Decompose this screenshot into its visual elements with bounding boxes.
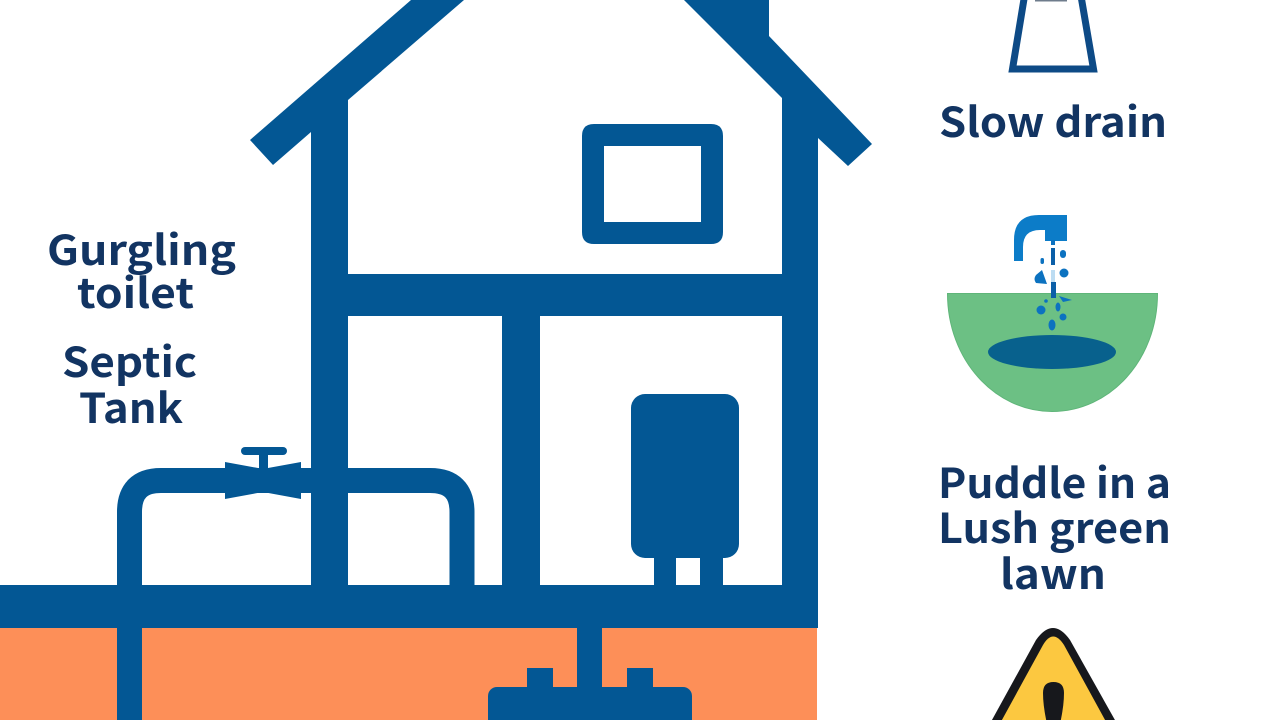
puddle — [988, 335, 1116, 369]
label: puddle in a lush green lawn — [938, 450, 1171, 601]
icon: slow drain funnel — [1012, 0, 1094, 69]
icon: puddle in lawn with leaking faucet — [948, 215, 1158, 412]
soil ground band — [0, 628, 817, 720]
plumbing pipe loop — [130, 480, 462, 590]
house diagram — [0, 0, 872, 720]
label: septic tank — [62, 329, 197, 435]
label: puddle in a lush green lawn: Puddle in a — [938, 450, 1171, 510]
label: puddle in a lush green lawn: Lush green — [938, 495, 1171, 555]
floor beam — [348, 274, 782, 316]
interior dividing wall — [502, 316, 540, 586]
water heater tank — [631, 394, 739, 587]
icon: warning triangle — [987, 628, 1120, 720]
faucet — [1014, 215, 1067, 261]
septic tank — [488, 668, 692, 720]
ground floor beam — [0, 585, 818, 628]
label: slow drain: Slow drain — [939, 89, 1167, 149]
label: gurgling toilet: Gurgling — [47, 217, 236, 277]
label: septic tank: Septic — [62, 329, 197, 389]
label: gurgling toilet — [47, 217, 236, 320]
label: gurgling toilet: toilet — [77, 260, 194, 320]
lawn mound — [948, 294, 1158, 412]
water drops — [1034, 240, 1072, 330]
label: septic tank: Tank — [79, 375, 183, 435]
upstairs window — [582, 124, 723, 244]
drain pipe into soil — [117, 626, 142, 720]
house walls — [311, 130, 818, 590]
shutoff valve — [225, 447, 301, 499]
roof and chimney — [250, 0, 872, 166]
septic feed pipe — [577, 626, 602, 690]
label: puddle in a lush green lawn: lawn — [1000, 541, 1106, 601]
